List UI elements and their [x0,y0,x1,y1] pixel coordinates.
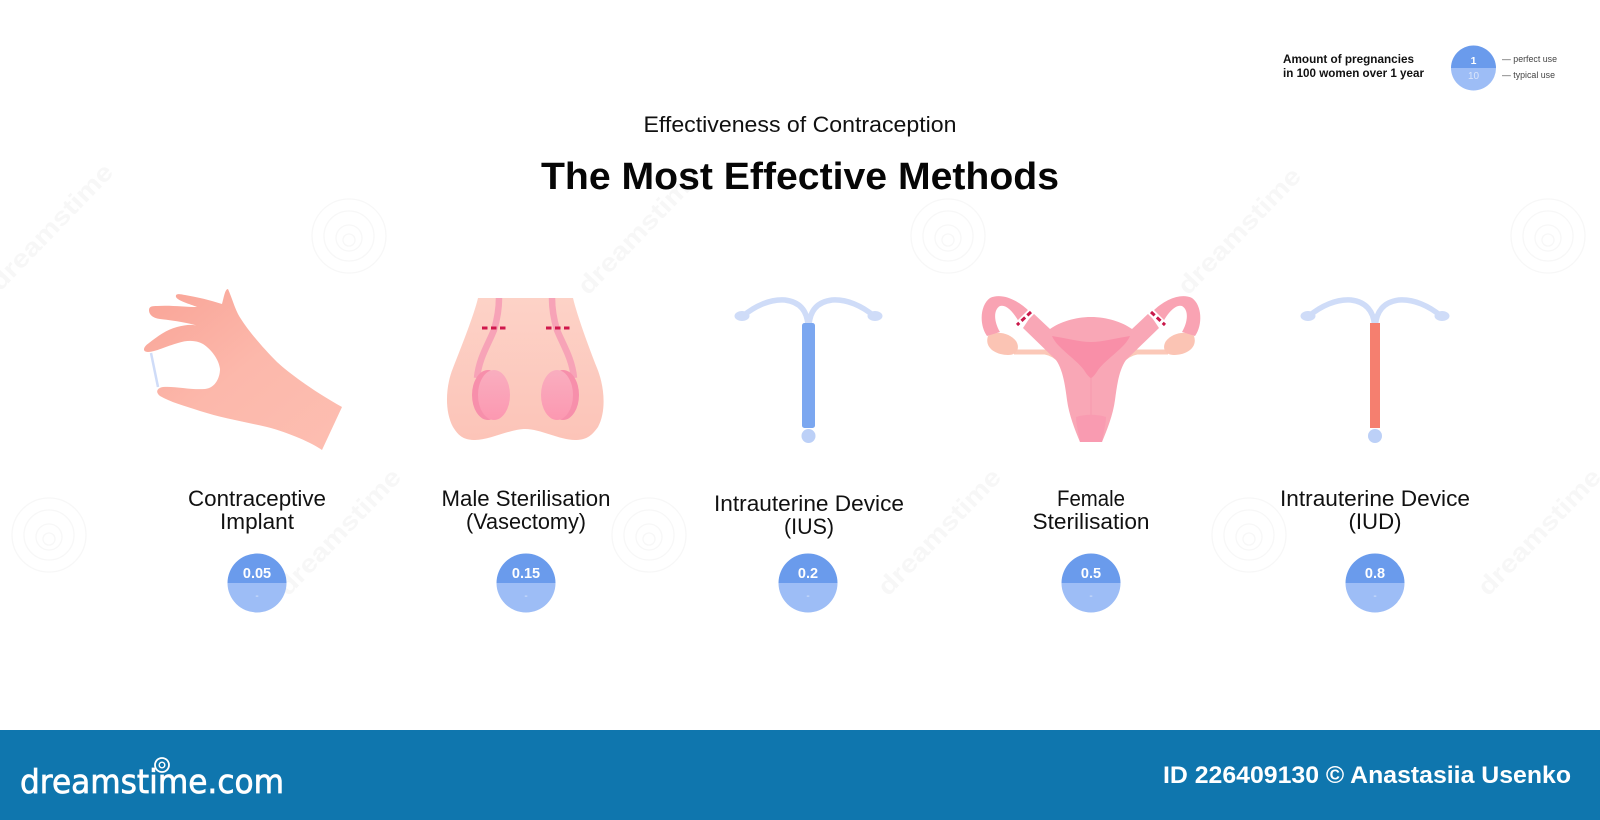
legend [1283,46,1557,91]
rate circle [228,554,286,612]
label: Intrauterine Device [1280,486,1470,511]
icon: hormonal IUS [734,300,882,443]
method: male sterilisation [442,298,610,612]
subtitle: Effectiveness of Contraception [644,112,956,137]
rate circle [1346,554,1404,612]
method: contraceptive implant [144,289,342,612]
rate circle: - [255,591,259,602]
rate circle: - [1373,591,1377,602]
watermark: dreamstime [872,463,1007,601]
rate circle: 0.5 [1081,566,1101,582]
label: Female [1057,486,1125,511]
label: (IUS) [784,514,834,539]
label: Contraceptive [188,486,326,511]
method: IUS [714,300,904,612]
label: Male Sterilisation [442,486,610,511]
icon: uterus [982,296,1200,442]
rate circle: 0.15 [512,566,540,582]
label: (IUD) [1348,509,1402,534]
label: Sterilisation [1032,509,1150,534]
label: (Vasectomy) [466,509,586,534]
footer band [0,730,1600,820]
legend key: — perfect use [1502,54,1557,64]
rate circle [1062,554,1120,612]
watermark: dreamstime [1472,463,1600,601]
icon: vasectomy [447,298,604,440]
watermark: dreamstime [1172,162,1307,300]
label: Implant [220,509,294,534]
rate circle: - [1089,591,1093,602]
watermark: dreamstime [272,463,407,601]
label: Intrauterine Device [714,491,904,516]
legend circle: 1 [1471,55,1477,67]
rate circle [778,554,838,612]
watermark: dreamstime [572,162,707,300]
rate circle: 0.8 [1365,566,1385,582]
legend circle: 10 [1468,71,1479,82]
legend caption: in 100 women over 1 year [1283,66,1424,80]
watermark [0,158,1600,601]
rate circle: - [806,591,810,602]
method: IUD [1280,300,1470,612]
rate circle: 0.2 [798,566,818,582]
method: female sterilisation [982,296,1200,612]
legend circle [1451,46,1496,91]
legend caption: Amount of pregnancies [1283,52,1414,66]
legend key: — typical use [1502,70,1555,80]
title: The Most Effective Methods [541,156,1059,198]
icon: hand holding implant [144,289,342,450]
footer credit: ID 226409130 © Anastasiia Usenko [1163,762,1571,789]
icon: copper IUD [1300,300,1450,443]
footer logo: dreamstime.com [20,762,284,801]
rate circle: - [524,591,528,602]
rate circle [496,554,556,612]
rate circle: 0.05 [243,566,271,582]
